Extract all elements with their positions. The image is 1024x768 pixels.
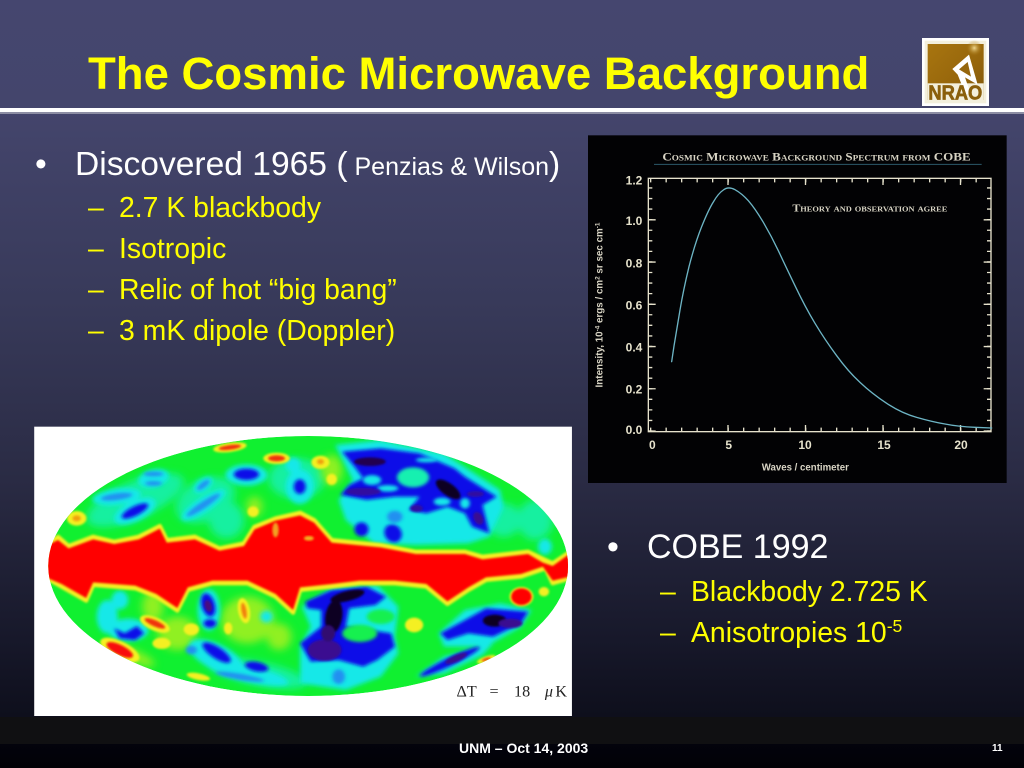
chart: COBE spectrum bbox=[588, 135, 1007, 483]
sky map: COBE anisotropy bbox=[34, 426, 572, 716]
sub-bullet: isotropic: – bbox=[88, 233, 104, 265]
spectrum curve bbox=[672, 188, 992, 428]
y axis title: sr sec cm bbox=[595, 228, 606, 276]
sub-bullet: relic: Relic of hot “big bang” bbox=[119, 274, 397, 306]
delta T label: 18 bbox=[514, 684, 530, 701]
x axis title: Waves / centimeter bbox=[762, 463, 849, 474]
title: The Cosmic Microwave Background bbox=[88, 48, 869, 99]
x axis labels bbox=[649, 438, 968, 452]
footer band bbox=[0, 717, 1024, 768]
x axis labels: 5 bbox=[725, 438, 732, 452]
sub-bullet: blackbody temperature: – bbox=[660, 576, 676, 608]
sub-bullet: isotropic: Isotropic bbox=[119, 233, 226, 265]
y axis labels: 0.8 bbox=[626, 256, 643, 270]
x axis labels: 15 bbox=[877, 438, 891, 452]
bullet: COBE 1992: • bbox=[607, 528, 619, 566]
sub-bullet: blackbody: – bbox=[88, 192, 104, 224]
sub-bullet: blackbody temperature: Blackbody 2.725 K bbox=[691, 576, 928, 608]
y axis labels: 0.4 bbox=[626, 341, 643, 355]
delta T label: = bbox=[490, 684, 499, 701]
annotation: Theory and observation agree bbox=[792, 204, 948, 215]
y axis labels: 1.0 bbox=[626, 214, 643, 228]
y axis title: Intensity, 10 bbox=[595, 331, 606, 387]
title rule bbox=[0, 108, 1024, 114]
blue cold regions bbox=[101, 448, 528, 684]
footer text: UNM – Oct 14, 2003 bbox=[459, 740, 588, 756]
red warm cores bbox=[72, 444, 491, 662]
spring green haze bbox=[79, 458, 553, 694]
y axis labels bbox=[626, 173, 643, 437]
sub-bullet: anisotropies: – bbox=[660, 617, 676, 649]
y axis labels: 1.2 bbox=[626, 173, 643, 187]
y axis labels: 0.0 bbox=[626, 423, 643, 437]
y axis title: -4 bbox=[594, 325, 601, 331]
lime warm haze bbox=[113, 455, 342, 671]
delta T label: K bbox=[555, 684, 568, 701]
sub-bullet: relic: – bbox=[88, 274, 104, 306]
plot frame and ticks bbox=[648, 178, 991, 432]
sub-bullet: anisotropies: Anisotropies 10-5 bbox=[691, 616, 902, 649]
x axis labels: 0 bbox=[649, 438, 656, 452]
sub-bullet: dipole: 3 mK dipole (Doppler) bbox=[119, 315, 395, 347]
bullet: discovered: • bbox=[35, 146, 47, 183]
page number: 11 bbox=[992, 743, 1003, 754]
text block: discovery bullets bbox=[35, 146, 560, 347]
y axis title: ergs / cm bbox=[595, 280, 606, 326]
delta T label bbox=[457, 684, 568, 701]
yellow warm patches bbox=[67, 440, 549, 682]
y axis title: 2 bbox=[594, 276, 601, 280]
y axis title: -1 bbox=[594, 222, 601, 228]
y axis labels: 0.6 bbox=[626, 298, 643, 312]
cyan regions bbox=[91, 440, 552, 691]
icon: NRAO logo: NRAO bbox=[928, 82, 982, 104]
bullet: COBE 1992: COBE 1992 bbox=[647, 528, 828, 566]
delta T label: μ bbox=[544, 684, 553, 701]
chart title: Cosmic Microwave Background Spectrum from COBE bbox=[662, 152, 971, 164]
delta T label: ΔT bbox=[457, 684, 477, 701]
bullet: discovered: Discovered 1965 ( Penzias & Wilson) bbox=[75, 146, 560, 183]
x axis labels: 20 bbox=[954, 438, 968, 452]
holes inside cold regions bbox=[342, 458, 470, 642]
x axis labels: 10 bbox=[798, 438, 812, 452]
text block: COBE bullets bbox=[607, 528, 928, 649]
dark cold cores bbox=[203, 457, 522, 666]
icon: NRAO logo bbox=[922, 38, 989, 106]
sub-bullet: dipole: – bbox=[88, 315, 104, 347]
y axis labels: 0.2 bbox=[626, 383, 643, 397]
sub-bullet: blackbody: 2.7 K blackbody bbox=[119, 192, 321, 224]
galactic plane band bbox=[44, 513, 570, 613]
